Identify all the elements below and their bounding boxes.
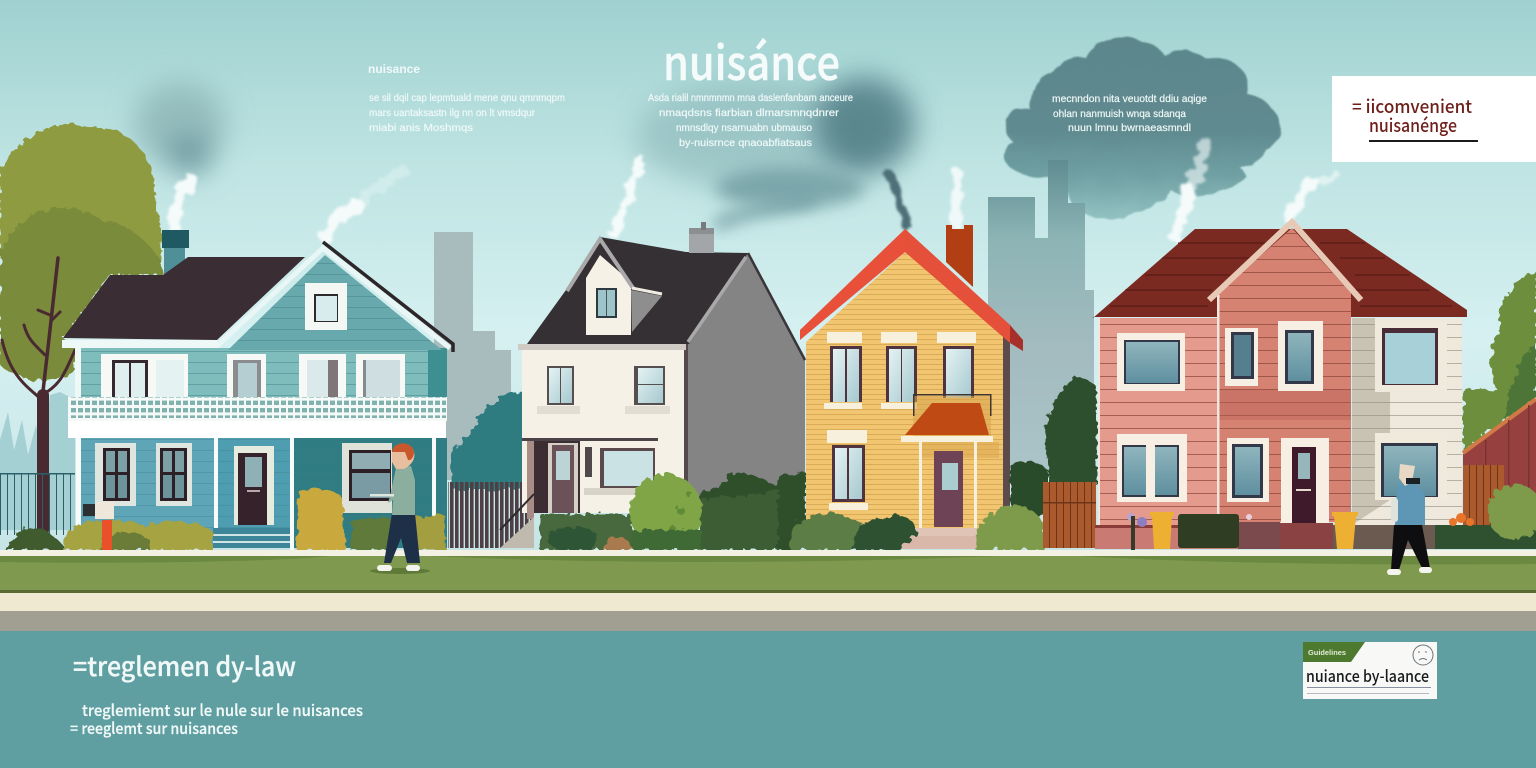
left wing wall bbox=[1098, 318, 1218, 525]
orange flowers bbox=[1449, 513, 1474, 526]
base bbox=[1095, 522, 1463, 549]
ground floor entry bbox=[522, 438, 658, 519]
cloud paragraph: ohlan nanmuish wnqa sdanqa bbox=[1053, 108, 1186, 120]
roof outline right bbox=[748, 253, 805, 360]
gable trim bbox=[1209, 222, 1361, 300]
house 2: cream and grey bbox=[518, 222, 805, 520]
balcony rail and shadow bbox=[913, 394, 992, 436]
large smoke cloud bbox=[1004, 37, 1280, 219]
tablet bbox=[370, 494, 394, 496]
grey side wall bbox=[686, 253, 805, 520]
sign rules bbox=[1307, 687, 1431, 694]
shoes bbox=[1387, 567, 1432, 575]
garden post bbox=[1131, 516, 1135, 556]
dark roof bbox=[527, 237, 748, 344]
legs bbox=[384, 513, 420, 563]
white panel bbox=[1332, 76, 1536, 162]
dark roof bbox=[63, 257, 305, 340]
right tree bbox=[1463, 272, 1536, 450]
centre paragraph: by-nuisrnce qnaoabfiatsaus bbox=[679, 137, 812, 149]
bottom teal band bbox=[0, 631, 1536, 768]
right bush bbox=[1487, 484, 1536, 540]
sidewalk bbox=[0, 593, 1536, 631]
small paragraph bbox=[369, 92, 565, 134]
ground floor window bbox=[584, 447, 655, 495]
porch posts bbox=[76, 438, 436, 550]
chimney bbox=[162, 230, 189, 277]
gable bbox=[228, 255, 442, 350]
flowers bbox=[1127, 513, 1252, 527]
cloud paragraph: mecnndon nita veuotdt ddiu aqige bbox=[1052, 93, 1207, 105]
legs bbox=[1391, 525, 1430, 570]
small paragraph: mars uantaksastn ilg nn on lt vmsdqur bbox=[369, 107, 535, 119]
upper windows bbox=[101, 354, 405, 400]
gable window bbox=[305, 283, 347, 330]
definition text bbox=[1352, 93, 1472, 138]
awning bbox=[901, 403, 999, 458]
central dark smoke bbox=[635, 77, 915, 228]
left grey smoke bbox=[134, 83, 226, 175]
windows bbox=[830, 346, 974, 502]
lower windows bbox=[95, 443, 392, 513]
right wooden fence bbox=[1463, 465, 1504, 530]
porch steps bbox=[213, 528, 290, 548]
right low hedge bbox=[1435, 525, 1536, 549]
right wing wall bbox=[1352, 318, 1462, 525]
house 2 shrubs bbox=[540, 471, 806, 551]
underline bbox=[1369, 140, 1478, 142]
centre paragraph: nmnsdlqy nsarnuabn ubmauso bbox=[676, 122, 812, 134]
chimney bbox=[689, 222, 714, 253]
cream wall bbox=[522, 350, 684, 513]
bottom left subtext: = reeglemt sur nuisances bbox=[70, 717, 238, 739]
lower wall bbox=[80, 438, 447, 548]
background city buildings left bbox=[434, 232, 511, 480]
green tab bbox=[1303, 642, 1365, 662]
arm bbox=[1391, 498, 1398, 522]
definition text: nuisanénge bbox=[1369, 112, 1457, 138]
chimney bbox=[946, 225, 973, 287]
cloud paragraph bbox=[1052, 93, 1207, 134]
left iron fence bbox=[0, 473, 75, 535]
door bbox=[1281, 438, 1329, 523]
front door bbox=[234, 446, 274, 525]
left small heading and text bbox=[368, 64, 565, 134]
tree behind yellow house bbox=[1010, 376, 1097, 515]
house 3: yellow bbox=[800, 225, 1023, 549]
white curb bbox=[0, 550, 1536, 556]
jacket bbox=[1395, 483, 1425, 525]
staircase and railing bbox=[500, 494, 534, 548]
balcony railing bbox=[68, 397, 447, 421]
hair bbox=[392, 443, 414, 460]
jacket bbox=[388, 466, 415, 515]
sky background bbox=[0, 0, 1536, 560]
house 1 shrubs bbox=[5, 489, 445, 550]
collar bbox=[1406, 478, 1420, 484]
yellow house shrubs bbox=[790, 505, 1044, 550]
house 4: pink and cream bbox=[1093, 222, 1467, 549]
mailbox bbox=[83, 502, 114, 550]
windows bbox=[1117, 321, 1447, 502]
yellow bins bbox=[1150, 512, 1358, 549]
upper window heads and sills bbox=[824, 332, 976, 510]
cloud paragraph: nuun lmnu bwrnaeasmndl bbox=[1068, 122, 1191, 134]
hedge bbox=[1178, 514, 1239, 548]
small heading: nuisance bbox=[368, 64, 420, 76]
bottom left subtext bbox=[70, 699, 363, 739]
bottom left heading: =treglemen dy-law bbox=[73, 647, 296, 684]
sign title: nuiance by-laance bbox=[1306, 663, 1429, 687]
head bbox=[1399, 464, 1415, 486]
steps bbox=[901, 528, 985, 549]
roof bbox=[1093, 229, 1467, 318]
shoes bbox=[377, 565, 420, 571]
main title: nuisánce bbox=[663, 25, 840, 94]
brown iron fence bbox=[448, 482, 533, 548]
tree trunk and branches bbox=[2, 258, 75, 530]
by-law sign bbox=[1303, 642, 1437, 699]
roof right edge bbox=[1010, 325, 1023, 351]
upper wall bbox=[75, 348, 447, 400]
small paragraph: se sil dqil cap lepmtuald mene qnu qmnmqpm bbox=[369, 92, 565, 104]
upper windows bbox=[537, 366, 670, 414]
wall bbox=[806, 252, 1003, 530]
person 1 with tablet bbox=[370, 443, 430, 574]
small paragraph: miabi anis Moshmqs bbox=[369, 122, 473, 134]
teal tree behind fence bbox=[452, 392, 525, 490]
orange wooden fence bbox=[1043, 482, 1096, 548]
sign panel bbox=[1303, 642, 1437, 699]
tree left bbox=[0, 124, 163, 530]
centre paragraph: Asda rialil nmnmnmn mna daslenfanbarn anceure bbox=[648, 92, 853, 104]
red roof bbox=[800, 229, 1010, 342]
centre paragraph: nmaqdsns fiarbian dlmarsmnqdnrer bbox=[659, 107, 840, 119]
sign face icon bbox=[1413, 645, 1433, 665]
red barn bbox=[1463, 399, 1536, 545]
porch floor band bbox=[68, 421, 446, 438]
house 1: blue bbox=[62, 230, 453, 550]
tab text: Guidelines bbox=[1308, 648, 1346, 657]
dormer bbox=[567, 239, 662, 335]
eave trim bbox=[518, 344, 686, 350]
door surround bbox=[919, 442, 977, 530]
centre paragraph bbox=[648, 92, 853, 149]
eave trim bbox=[62, 340, 220, 348]
shadow bbox=[370, 568, 430, 574]
definition box bbox=[1332, 76, 1536, 162]
definition text: = iicomvenient bbox=[1352, 93, 1472, 119]
pink house front planting and bins bbox=[1127, 484, 1536, 556]
central wing wall bbox=[1218, 228, 1351, 522]
white chimney smoke plumes bbox=[173, 142, 1336, 236]
pale spiky background trees bbox=[0, 392, 75, 530]
door bbox=[934, 451, 963, 527]
tree crown bbox=[0, 124, 162, 381]
person 2 walking bbox=[1387, 464, 1432, 575]
bottom left subtext: treglemiemt sur le nule sur le nuisances bbox=[82, 699, 363, 721]
gable trim bbox=[217, 248, 450, 348]
background city buildings right bbox=[988, 160, 1094, 470]
head bbox=[392, 444, 414, 469]
lawn bbox=[0, 556, 1536, 593]
